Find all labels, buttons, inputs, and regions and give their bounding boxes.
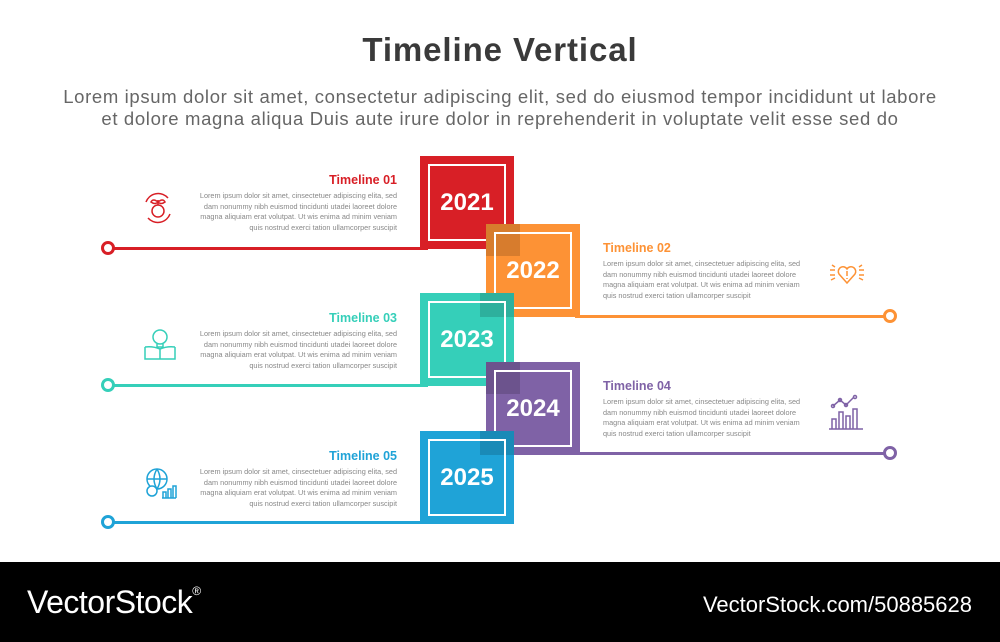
text 01: quis nostrud exerci tation ullamcorper suscipit [249,223,397,232]
text 02: magna aliquiam erat volutpat. Ut wis enima ad minim veniam [603,280,800,289]
dot 1 [101,241,115,255]
text 05 [200,449,397,508]
box 2024: 2024 [506,394,560,422]
footer bar [0,562,1000,642]
text 05: magna aliquiam erat volutpat. Ut wis enima ad minim veniam [200,488,397,497]
text 04: dam nonummy nibh euismod tincidunti utadei laoreet dolore [603,408,796,417]
box 2025 [420,431,514,524]
box 2022: 2022 [506,256,560,284]
box 2021: 2021 [440,188,494,216]
line 2 [575,315,890,318]
text 04: magna aliquiam erat volutpat. Ut wis enima ad minim veniam [603,418,800,427]
text 03: quis nostrud exerci tation ullamcorper suscipit [249,361,397,370]
text 05: dam nonummy nibh euismod tincidunti utadei laoreet dolore [204,478,397,487]
text 01: Timeline 01 [329,173,397,187]
line 1 [108,247,428,250]
dot 4 [883,446,897,460]
box 2023 [420,293,514,386]
title: Timeline Vertical [362,31,638,68]
icon: heart [830,264,864,284]
text 02: Lorem ipsum dolor sit amet, cinsectetuer adipiscing elita, sed [603,259,800,268]
footer url: VectorStock.com/50885628 [703,592,972,617]
footer brand: VectorStock® [27,584,201,620]
line 4 [575,452,890,455]
subtitle: Lorem ipsum dolor sit amet, consectetur adipiscing elit, sed do eiusmod tempor incididunt ut labore [63,86,937,107]
text 01 [200,173,397,232]
text 02: Timeline 02 [603,241,671,255]
box 2021 [420,156,514,249]
text 03: dam nonummy nibh euismod tincidunti utadei laoreet dolore [204,340,397,349]
text 03 [200,311,397,370]
icon: book bulb [144,329,176,360]
box 2025: 2025 [440,464,494,490]
text 04: quis nostrud exerci tation ullamcorper suscipit [603,429,751,438]
icon: globe money [146,468,177,499]
text 04 [603,379,800,438]
subtitle: et dolore magna aliqua Duis aute irure dolor in reprehenderit in voluptate velit esse sed do [101,108,899,129]
text 01: magna aliquiam erat volutpat. Ut wis enima ad minim veniam [200,212,397,221]
line 3 [108,384,428,387]
text 02: dam nonummy nibh euismod tincidunti utadei laoreet dolore [603,270,796,279]
text 02: quis nostrud exerci tation ullamcorper suscipit [603,291,751,300]
dot 2 [883,309,897,323]
text 04: Lorem ipsum dolor sit amet, cinsectetuer adipiscing elita, sed [603,397,800,406]
text 03: Timeline 03 [329,311,397,325]
line 5 [108,521,428,524]
text 04: Timeline 04 [603,379,671,393]
icon: globe plant [145,192,171,224]
text 05: quis nostrud exerci tation ullamcorper suscipit [249,499,397,508]
icon: chart [829,394,863,430]
text 05: Lorem ipsum dolor sit amet, cinsectetuer adipiscing elita, sed [200,467,397,476]
box 2023: 2023 [440,326,494,352]
text 01: dam nonummy nibh euismod tincidunti utadei laoreet dolore [204,202,397,211]
text 03: magna aliquiam erat volutpat. Ut wis enima ad minim veniam [200,350,397,359]
text 02 [603,241,800,300]
dot 5 [101,515,115,529]
text 05: Timeline 05 [329,449,397,463]
text 03: Lorem ipsum dolor sit amet, cinsectetuer adipiscing elita, sed [200,329,397,338]
box 2022 [486,224,580,317]
dot 3 [101,378,115,392]
subtitle [63,86,937,129]
box 2024 [486,362,580,455]
text 01: Lorem ipsum dolor sit amet, cinsectetuer adipiscing elita, sed [200,191,397,200]
